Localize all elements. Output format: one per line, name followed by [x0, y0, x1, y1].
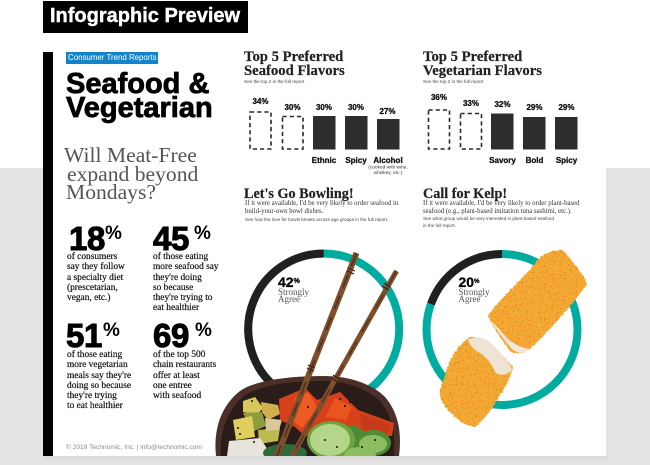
salmon: [279, 388, 394, 436]
stat: 69%: of the top 500: [153, 350, 205, 360]
donut: 42% strongly agree: Strongly: [278, 287, 310, 297]
stat: 18%: of consumers: [67, 252, 117, 262]
stat: 18%: a specialty diet: [67, 273, 123, 283]
text: kelp question: [423, 200, 580, 214]
heading: seafood flavors: Top 5 Preferred: [244, 49, 343, 65]
chart: seafood flavors: (cooked with wine,: [368, 164, 408, 170]
note: vegetarian flavors: See the top 2 in the full report: [423, 79, 483, 84]
photo: poke bowl: [215, 376, 400, 465]
photo: breaded plant-based seafood sticks: [440, 250, 587, 427]
text: kelp question: seafood (e.g., plant-based imitation tuna sashimi, etc.).: [423, 208, 572, 214]
stat: 51%: they're trying: [67, 391, 117, 401]
upper stick: [488, 250, 587, 353]
chart: vegetarian flavors: Spicy: [556, 156, 578, 165]
chart: seafood flavors: [250, 97, 408, 176]
note: bowling: See how the love for bowls breaks across age groups in the full report.: [245, 217, 388, 222]
tag: Consumer Trend Reports: Consumer Trend Reports: [68, 53, 157, 62]
note: kelp: in the full report.: [423, 222, 456, 228]
title banner: Infographic Preview: [43, 1, 248, 33]
title banner: Infographic Preview: Infographic Preview: [50, 5, 240, 27]
stat: 51%: of those eating: [67, 350, 122, 360]
chart: seafood flavors: Ethnic: [312, 156, 337, 165]
heading: vegetarian flavors: Top 5 Preferred: [423, 49, 522, 65]
chart: seafood flavors: 30%: [284, 103, 301, 112]
avocado: [233, 397, 282, 444]
stat: 51%: 51: [66, 317, 102, 354]
chart: vegetarian flavors: 29%: [558, 103, 575, 112]
chart: vegetarian flavors: Bold: [526, 156, 543, 165]
black side bar: [43, 52, 53, 456]
donut: 20% strongly agree: Agree: [458, 294, 480, 304]
chart: seafood flavors: Alcohol: [373, 156, 403, 165]
heading: vegetarian flavors: Vegetarian Flavors: [423, 62, 542, 78]
heading: Call for Kelp: Call for Kelp!: [423, 186, 507, 202]
stat: 69%: 69: [153, 317, 189, 354]
chart: seafood flavors: 27%: [379, 107, 396, 116]
stat: 45%: eat healthier: [153, 303, 199, 313]
text: bowling question: [245, 200, 398, 214]
greens: [263, 444, 307, 456]
note: kelp: See what group would be very interested in plant-based seafood: [423, 216, 554, 221]
chart: seafood flavors: 34%: [252, 97, 269, 106]
footer: © 2019 Technomic, Inc. | info@technomic.com: [66, 444, 202, 451]
bar charts: [249, 93, 578, 176]
chart: vegetarian flavors: 33%: [463, 99, 479, 108]
chart: vegetarian flavors: 36%: [431, 93, 447, 102]
subheading: Will Meat-Free: [64, 143, 197, 167]
stat: 18%: say they follow: [67, 262, 125, 272]
stat: 51%: %: [103, 320, 120, 341]
stat: 51%: doing so because: [67, 381, 131, 391]
cucumber: [346, 425, 364, 448]
stat: 18%: %: [105, 223, 122, 244]
main heading: [66, 68, 213, 124]
stat: 69%: %: [195, 320, 212, 341]
text: bowling question: build-your-own bowl dishes.: [245, 208, 323, 214]
stat: 45%: [153, 220, 219, 313]
stat: 45%: of those eating: [153, 252, 208, 262]
stat: 18%: 18: [69, 220, 105, 257]
stat: 45%: more seafood say: [153, 262, 219, 272]
heading: seafood flavors: [244, 49, 345, 78]
stat: 69%: offer at least: [153, 371, 200, 381]
chart: seafood flavors: 30%: [316, 103, 332, 112]
gray backdrop: [0, 168, 650, 465]
chart: vegetarian flavors: 32%: [494, 100, 511, 109]
chart: vegetarian flavors: Savory: [489, 156, 516, 165]
note: seafood flavors: See the top 2 in the full report: [244, 79, 304, 84]
stat: 51%: [66, 317, 131, 411]
sesame seeds: [237, 398, 376, 448]
donut: 42% strongly agree: %: [294, 278, 301, 285]
stat: 45%: they're doing: [153, 273, 202, 283]
chart: seafood flavors: Spicy: [345, 156, 367, 165]
donut: 20% strongly agree: 20: [458, 274, 474, 290]
heading: seafood flavors: Seafood Flavors: [244, 62, 345, 78]
stat: 69%: one entree: [153, 381, 192, 391]
stat: 18%: vegan, etc.): [67, 293, 110, 303]
stat: 51%: meals say they're: [67, 371, 131, 381]
stat: 18%: [66, 220, 125, 303]
donut: 42% strongly agree: [248, 254, 399, 404]
stat: 51%: to eat healthier: [67, 401, 123, 411]
subheading: expand beyond: [67, 162, 198, 186]
stat: 69%: chain restaurants: [153, 360, 216, 370]
icon: chopsticks: [277, 253, 396, 456]
chart: vegetarian flavors: [428, 93, 578, 165]
stat: 45%: they're trying to: [153, 293, 212, 303]
subheading: [64, 143, 198, 204]
stat: 69%: [152, 317, 216, 401]
lower stick: [440, 337, 513, 427]
chart: seafood flavors: 30%: [348, 103, 364, 112]
stat: 45%: so because: [153, 283, 193, 293]
note: kelp: [423, 216, 554, 228]
rice: [227, 438, 267, 456]
donut: 20% strongly agree: [426, 254, 578, 405]
donut: 42% strongly agree: Agree: [278, 294, 300, 304]
stat: 51%: more vegetarian: [67, 360, 128, 370]
lower stick broken end: [468, 337, 512, 375]
donut: 42% strongly agree: 42: [278, 274, 294, 290]
donut charts and photos: [215, 249, 588, 456]
text: kelp question: If it were available, I'd be very likely to order plant-based: [423, 200, 580, 207]
donut: 20% strongly agree: Strongly: [458, 287, 490, 297]
main heading: Seafood &: [66, 68, 209, 100]
stat: 45%: 45: [153, 220, 189, 257]
donut: 20% strongly agree: %: [474, 279, 480, 285]
chart: seafood flavors: whiskey, etc.): [374, 170, 403, 176]
white report panel: [43, 52, 606, 456]
heading: vegetarian flavors: [423, 49, 542, 78]
stat: 69%: with seafood: [153, 391, 201, 401]
main heading: Vegetarian: [66, 92, 213, 124]
subheading: Mondays?: [66, 180, 156, 204]
panel bottom shadow: [43, 456, 609, 460]
heading: Let's Go Bowling: Let's Go Bowling!: [244, 186, 354, 202]
text: bowling question: If it were available, I'd be very likely to order seafood in: [245, 200, 398, 207]
upper stick broken end: [489, 320, 530, 353]
stat: 45%: %: [194, 223, 211, 244]
stat: 18%: (prescetarian,: [67, 283, 118, 293]
chart: vegetarian flavors: 29%: [526, 103, 543, 112]
bowl body: [215, 376, 400, 456]
